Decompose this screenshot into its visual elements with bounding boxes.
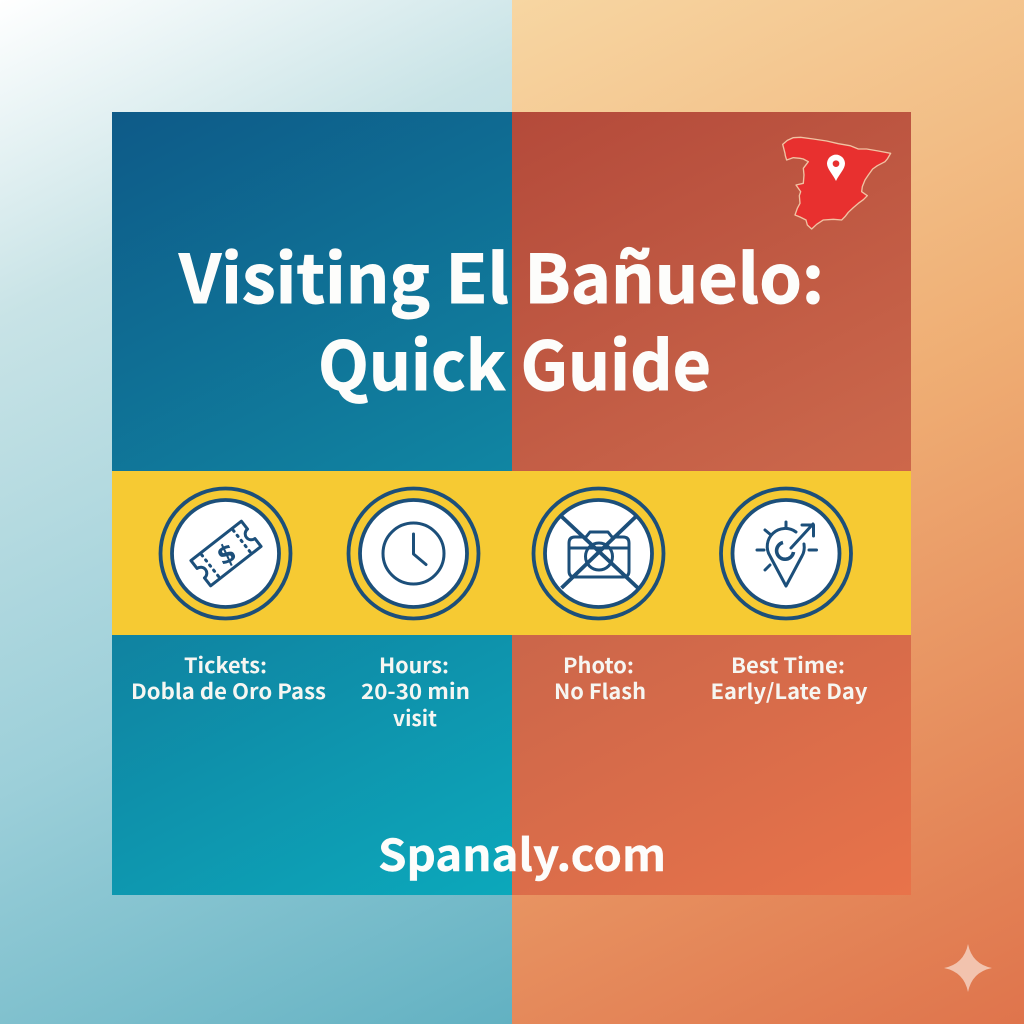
- background: left half: [0, 0, 512, 1024]
- icon: ticket: $: [212, 537, 241, 572]
- icon: ticket: [160, 488, 290, 618]
- label: tickets: Tickets:: [184, 650, 267, 680]
- label: best time: Early/Late Day: [710, 676, 868, 706]
- website footer: Spanaly.com: [378, 820, 666, 884]
- title: Visiting El Bañuelo:: [178, 226, 824, 323]
- label: hours: 20-30 min: [361, 676, 470, 706]
- icon: Spain map with location pin: [783, 137, 891, 229]
- label: tickets: [131, 650, 326, 706]
- panel: left blue: [112, 112, 512, 895]
- title: Quick Guide: [318, 313, 711, 410]
- icon: sparkle: [944, 944, 992, 992]
- label: hours: [361, 650, 470, 733]
- icon: camera crossed out: [534, 488, 664, 618]
- icon: clock: [348, 488, 478, 618]
- label: best time: Best Time:: [731, 650, 845, 680]
- background: right half: [512, 0, 1024, 1024]
- icon: location pin: [827, 155, 845, 181]
- label: hours: visit: [393, 703, 437, 733]
- title: [178, 226, 824, 410]
- label: photo: No Flash: [554, 676, 646, 706]
- label: tickets: Dobla de Oro Pass: [131, 676, 326, 706]
- label: photo: Photo:: [563, 650, 634, 680]
- label: best time: [710, 650, 868, 706]
- icon: pin with arrow and rays: [721, 488, 851, 618]
- label: photo: [554, 650, 646, 706]
- yellow icon band: [112, 471, 911, 635]
- label: hours: Hours:: [379, 650, 449, 680]
- panel: right terracotta: [512, 112, 911, 895]
